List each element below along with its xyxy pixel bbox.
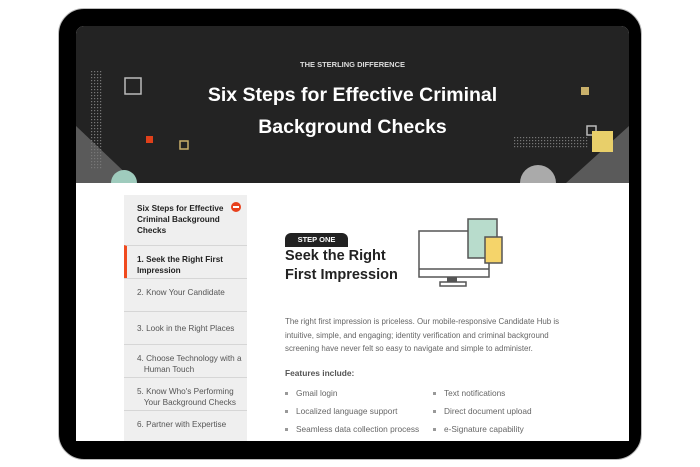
features list left [285, 388, 419, 434]
features list right: Text notifications [444, 388, 505, 398]
sidebar nav [124, 195, 247, 441]
features list right: Direct document upload [444, 406, 532, 416]
nav header [137, 204, 224, 235]
icon: minus [231, 202, 241, 212]
nav item 1 active [124, 245, 247, 278]
features list left: Seamless data collection process [296, 424, 419, 434]
title: Background Checks [258, 116, 447, 138]
nav item 3 [124, 311, 247, 344]
step heading [285, 248, 398, 283]
icon: devices [418, 218, 503, 287]
nav item 4 [124, 344, 247, 377]
body paragraph: intuitive, simple, and engaging; identity verification and criminal background [285, 330, 549, 340]
screen [76, 26, 629, 441]
title: Six Steps for Effective Criminal [208, 84, 497, 106]
nav item 1 active: Impression [137, 266, 181, 275]
body paragraph [285, 317, 559, 353]
features heading: Features include: [285, 368, 354, 378]
step heading: Seek the Right [285, 248, 386, 264]
nav item 4: 4. Choose Technology with a [137, 354, 242, 363]
step heading: First Impression [285, 267, 398, 283]
kicker: THE STERLING DIFFERENCE [300, 60, 405, 69]
nav item 4: Human Touch [144, 365, 194, 374]
nav header: Six Steps for Effective [137, 204, 223, 213]
nav item 1 active: 1. Seek the Right First [137, 255, 223, 264]
nav item 5 [124, 377, 247, 410]
step badge [285, 233, 348, 247]
body paragraph: The right first impression is priceless. Our mobile-responsive Candidate Hub is [285, 317, 559, 326]
nav item 5: 5. Know Who's Performing [137, 387, 234, 396]
title [208, 84, 497, 138]
nav item 6 [124, 410, 247, 441]
nav item 6: 6. Partner with Expertise [137, 420, 226, 429]
features list left: Localized language support [296, 406, 397, 416]
nav header: Checks [137, 226, 166, 235]
features list right [433, 388, 532, 434]
nav item 5: Your Background Checks [144, 398, 236, 407]
step badge: STEP ONE [298, 235, 335, 244]
nav item 2 [124, 278, 247, 311]
nav item 2: 2. Know Your Candidate [137, 288, 225, 297]
nav item 3: 3. Look in the Right Places [137, 324, 234, 333]
features list left: Gmail login [296, 388, 338, 398]
features list right: e-Signature capability [444, 424, 524, 434]
nav header: Criminal Background [137, 215, 220, 224]
header banner [76, 26, 629, 183]
body paragraph: screening have never felt so easy to navigate and simple to administer. [285, 344, 533, 353]
